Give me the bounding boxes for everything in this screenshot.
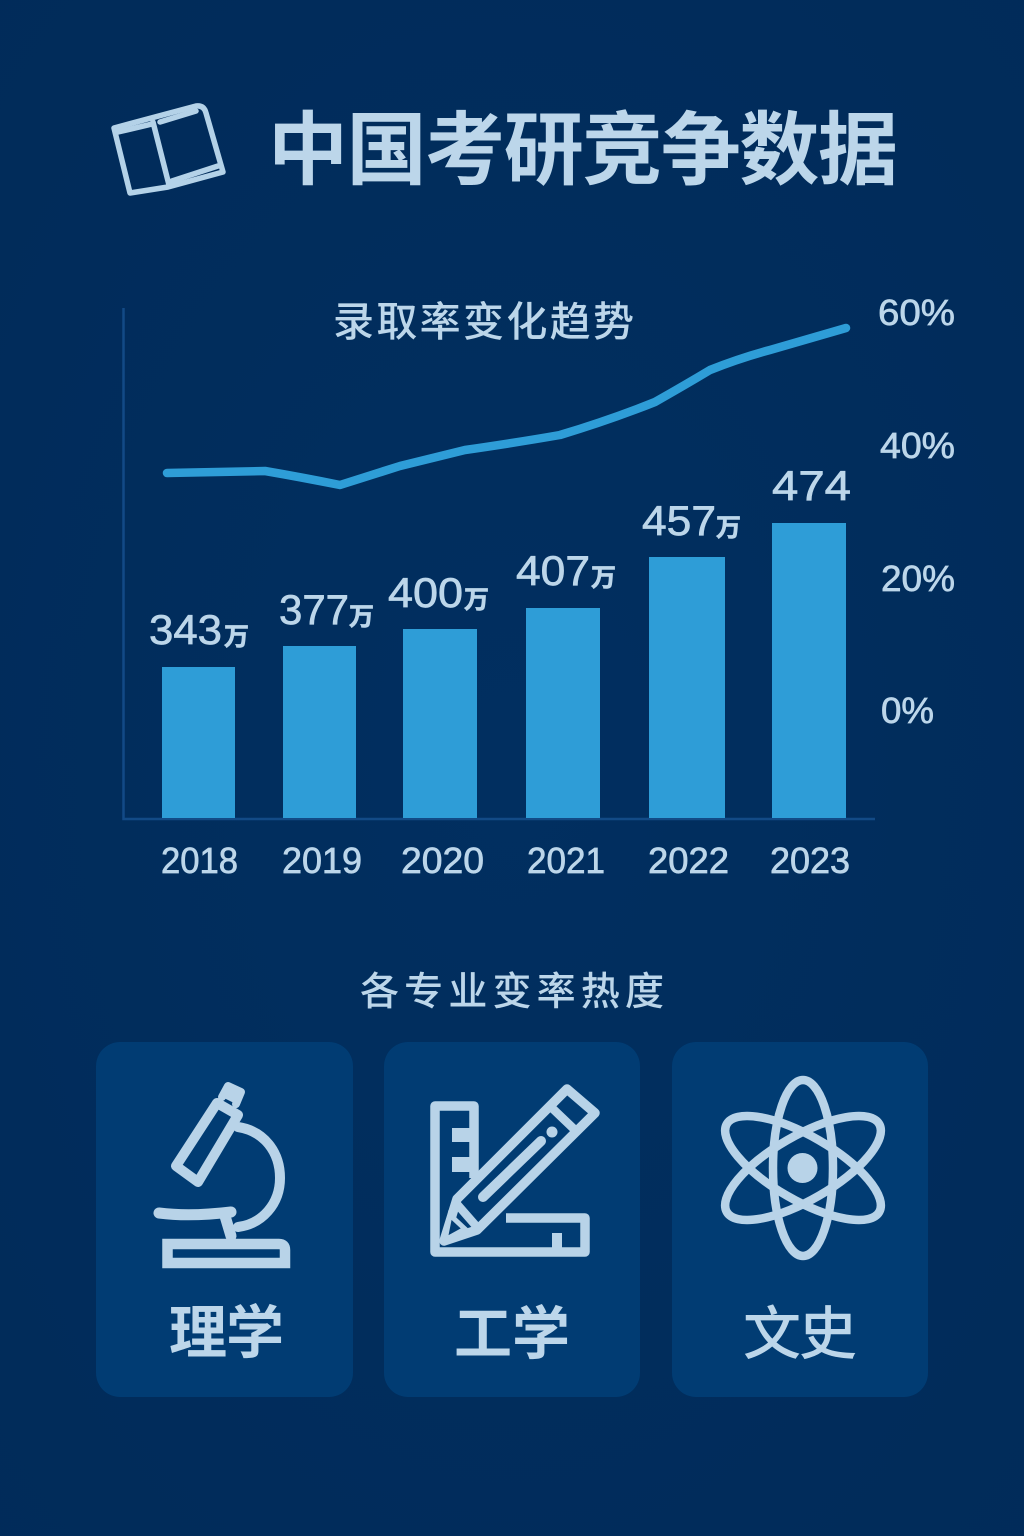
- right axis percent labels: 0%: [881, 690, 934, 731]
- x axis year labels: 2022: [648, 840, 729, 881]
- icon: open book: [114, 106, 223, 193]
- bar value labels: 400: [388, 569, 463, 616]
- chart heading: 录取率变化趋势: [333, 288, 634, 348]
- x axis year labels: 2020: [401, 840, 484, 881]
- bar value labels: 474: [772, 462, 851, 509]
- x axis year labels: 2018: [161, 840, 238, 881]
- bar value labels: 万: [591, 558, 616, 594]
- bar value labels: 457: [642, 497, 716, 544]
- icon: microscope: [159, 1086, 285, 1263]
- chart axes: [124, 308, 875, 819]
- panel: engineering card: [384, 1042, 640, 1397]
- right axis percent labels: 20%: [881, 558, 955, 599]
- bar value labels: 343: [149, 606, 222, 653]
- x axis year labels: 2019: [282, 840, 362, 881]
- x axis year labels: 2021: [527, 840, 605, 881]
- bar value labels: 万: [224, 617, 249, 653]
- card label: 工学: [454, 1287, 570, 1371]
- card label: 理学: [169, 1286, 284, 1370]
- icon: atom: [711, 1080, 895, 1256]
- bar value labels: [149, 462, 851, 653]
- icon: ruler and pencil: [435, 1089, 595, 1252]
- card label: 文史: [743, 1287, 857, 1371]
- panel: humanities card: [672, 1042, 928, 1397]
- bar value labels: 万: [349, 597, 374, 633]
- panel: science card: [96, 1042, 353, 1397]
- x axis year labels: [161, 840, 850, 881]
- bar value labels: 万: [716, 508, 741, 544]
- right axis percent labels: [878, 292, 955, 731]
- bar chart: [162, 523, 846, 818]
- right axis percent labels: 60%: [878, 292, 955, 333]
- right axis percent labels: 40%: [880, 425, 955, 466]
- panel: trend chart: [124, 288, 955, 881]
- title: 中国考研竞争数据: [268, 86, 898, 202]
- section heading: 各专业变率热度: [360, 961, 664, 1017]
- x axis year labels: 2023: [770, 840, 850, 881]
- line chart: admission rate: [167, 328, 846, 485]
- bar value labels: 万: [464, 580, 489, 616]
- bar value labels: 377: [279, 586, 349, 633]
- bar value labels: 407: [516, 547, 590, 594]
